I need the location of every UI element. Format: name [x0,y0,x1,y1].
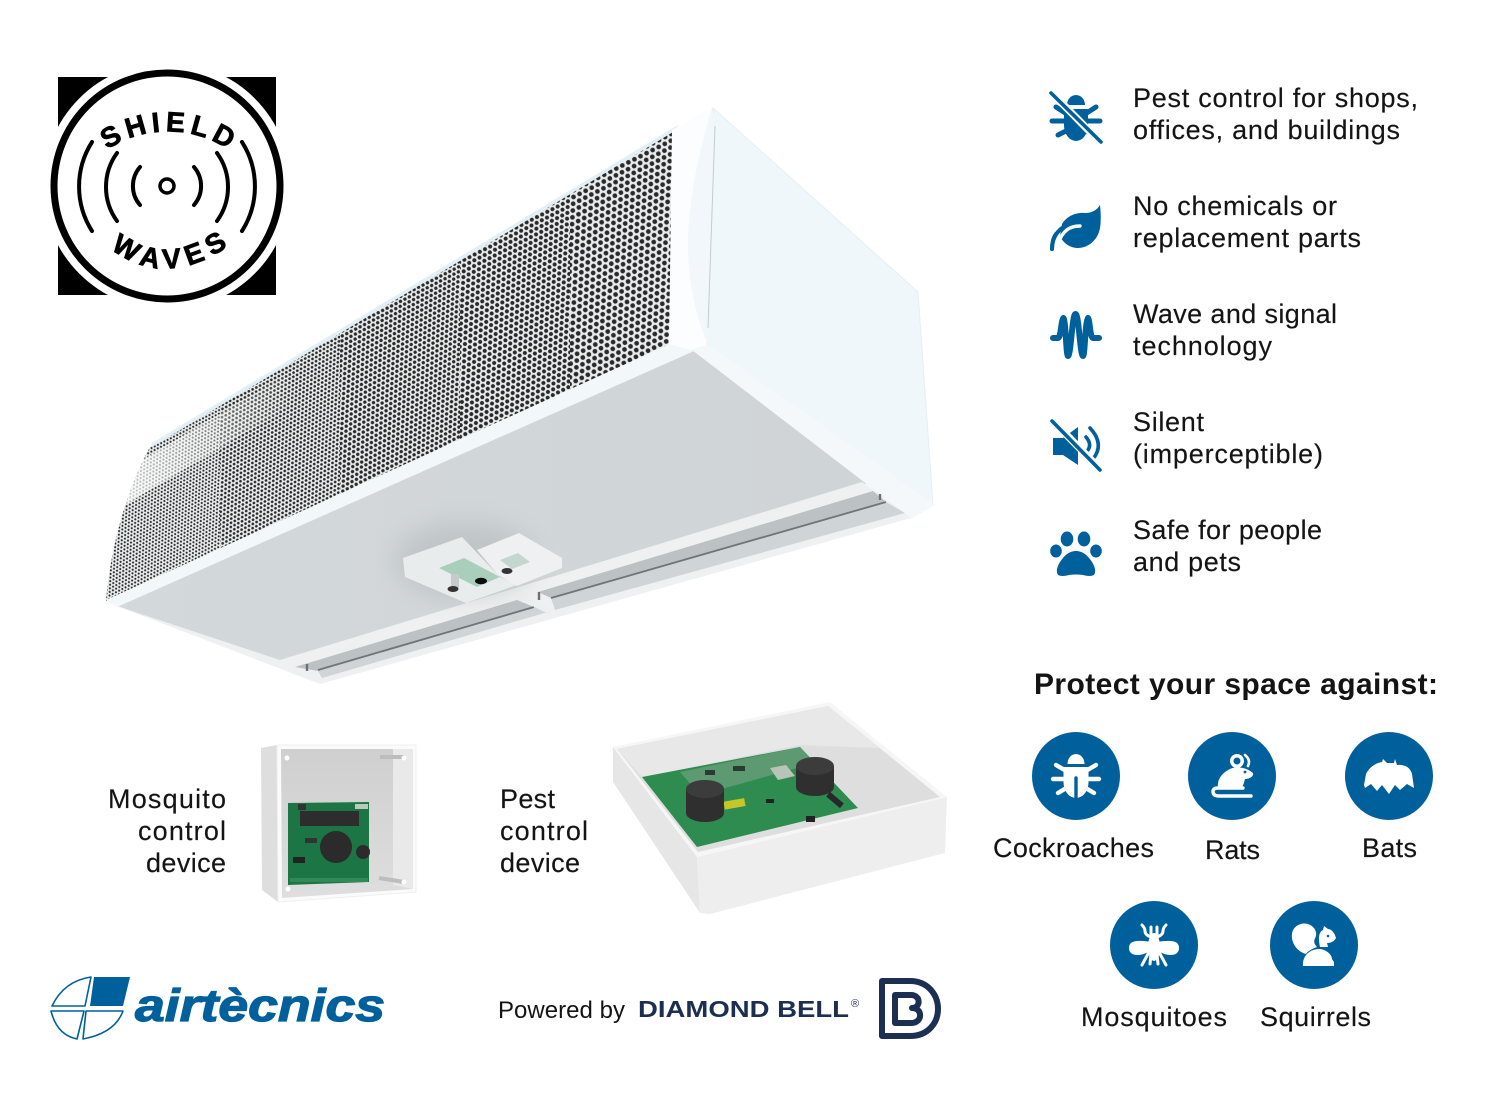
label: pest control device: Pest [500,784,555,814]
label: pest control device: control [500,816,588,846]
feature: wave technology [1053,299,1337,361]
feature: no chemicals: No chemicals or [1133,191,1337,221]
feature: wave technology: technology [1133,331,1272,361]
circuit board [642,747,858,847]
feature: safe for people and pets: Safe for people [1133,515,1322,545]
feature: no chemicals: replacement parts [1133,223,1361,253]
circuit board [288,802,370,885]
underside lip [117,482,911,684]
feature: pest control: offices, and buildings [1133,115,1400,145]
grille lower trim [106,343,708,607]
powered by Diamond Bell: DIAMOND BELL [638,996,849,1022]
powered by Diamond Bell: Powered by [498,997,625,1024]
perforated grille [106,132,672,601]
label: mosquito control device [108,784,226,878]
powered by Diamond Bell: ® [851,998,859,1010]
pest: bats: Bats [1362,833,1417,863]
underside panel [117,350,870,683]
label: mosquito control device: control [138,816,226,846]
pest: rats: Rats [1205,835,1260,865]
label: mosquito control device: Mosquito [108,784,226,814]
pest: squirrels: Squirrels [1260,1002,1371,1032]
pest: cockroaches [993,732,1154,863]
powered by Diamond Bell [498,981,938,1036]
pest: mosquitoes: Mosquitoes [1081,1002,1227,1032]
icon: DB monogram [882,981,938,1036]
feature: safe for people and pets: and pets [1133,547,1241,577]
pest: squirrels [1260,901,1371,1032]
sensor modules [395,522,562,603]
air outlet rails [295,491,905,678]
logo: Shield Waves: SHIELD [100,112,234,148]
logo: airtecnics [51,977,385,1039]
pest: rats [1188,732,1276,865]
product illustration: wall-mounted unit [100,100,935,684]
feature: safe for people and pets [1050,515,1322,577]
label: pest control device [500,784,588,878]
pest: cockroaches: Cockroaches [993,833,1154,863]
label: mosquito control device: device [146,848,226,878]
mosquito control device illustration [261,745,416,902]
feature: silent: Silent [1133,407,1204,437]
pest: bats [1345,732,1433,863]
feature: no chemicals [1052,191,1361,253]
feature: silent: (imperceptible) [1133,439,1323,469]
logo: Shield Waves: WAVES [114,232,226,270]
logo: Shield Waves [50,70,284,302]
feature: pest control: Pest control for shops, [1133,83,1418,113]
pest: mosquitoes [1081,901,1227,1032]
label: pest control device: device [500,848,580,878]
feature: pest control [1051,83,1418,145]
feature list [1050,83,1418,577]
end cap [669,107,712,350]
feature: wave technology: Wave and signal [1133,299,1337,329]
logo: airtecnics: airtècnics [135,980,385,1031]
unit side panel [692,108,933,518]
pest control device illustration [613,702,947,914]
feature: silent [1052,407,1323,470]
heading: protect your space: Protect your space against: [1034,668,1438,701]
